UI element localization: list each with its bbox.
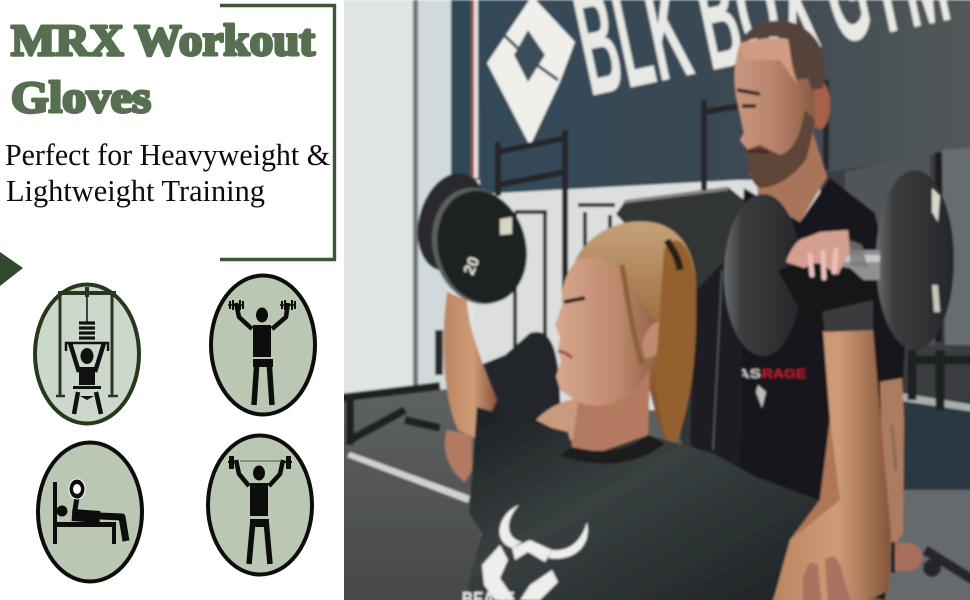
gym rack bbox=[498, 80, 826, 300]
floor bbox=[340, 385, 480, 600]
background equipment bbox=[482, 330, 562, 428]
left bench frame bbox=[340, 386, 440, 445]
hair bbox=[575, 221, 696, 453]
left dumbbell: 20 bbox=[461, 255, 483, 277]
left dumbbell bbox=[416, 172, 528, 306]
trainer forearm bbox=[880, 378, 904, 560]
icon: dumbbell shoulder press bbox=[211, 276, 315, 414]
far shoulder bbox=[536, 398, 582, 440]
mid background white bbox=[474, 180, 824, 410]
icon: lat pulldown machine bbox=[35, 284, 139, 424]
right background bbox=[903, 400, 970, 490]
trainer shirt print: AS bbox=[737, 366, 761, 381]
banner logo bbox=[487, 0, 575, 146]
woman left arm bbox=[444, 292, 497, 440]
woman shirt bbox=[463, 407, 819, 600]
photo base bbox=[473, 16, 886, 600]
trainer hand at elbow bbox=[445, 430, 472, 482]
wall side stripe bbox=[451, 0, 472, 178]
icon: barbell overhead press bbox=[208, 436, 312, 574]
trainer ear bbox=[810, 81, 830, 129]
hair strand and eye bbox=[622, 265, 642, 365]
trainer eye details bbox=[737, 90, 760, 106]
gym photo bbox=[340, 0, 970, 600]
title second line: Gloves bbox=[11, 73, 151, 122]
title: MRX Workout bbox=[11, 16, 315, 65]
icon: bench press bbox=[38, 442, 142, 582]
trainer beard bbox=[746, 110, 815, 188]
ponytail bbox=[656, 241, 696, 453]
woman right arm bbox=[772, 330, 891, 600]
subtitle: Perfect for Heavyweight & bbox=[5, 137, 330, 172]
pillar bbox=[418, 0, 452, 390]
ear bbox=[642, 320, 660, 359]
subtitle second line: Lightweight Training bbox=[6, 173, 265, 208]
floor stripe bbox=[347, 452, 470, 503]
bench backrest bbox=[616, 187, 744, 480]
trainer torso bbox=[738, 178, 906, 600]
white wall bbox=[340, 0, 474, 420]
woman face and neck bbox=[554, 258, 657, 408]
trainer neck bbox=[756, 130, 827, 222]
glove and hand bbox=[778, 230, 875, 332]
trainer shirt print bbox=[740, 367, 808, 380]
trainer hair bbox=[740, 21, 825, 90]
trainer face bbox=[734, 40, 815, 188]
banner wall bbox=[478, 0, 970, 194]
trainer shirt print: RAGE bbox=[762, 366, 806, 381]
arrow marker bbox=[0, 252, 23, 286]
white background panel bbox=[0, 0, 344, 600]
right dumbbell bbox=[724, 170, 954, 356]
trainer fingers on arm bbox=[803, 556, 852, 600]
corner bracket frame bbox=[220, 6, 334, 260]
trainer bbox=[732, 19, 906, 600]
shirt bull logo bbox=[482, 505, 588, 600]
mirror wall bbox=[820, 147, 970, 410]
